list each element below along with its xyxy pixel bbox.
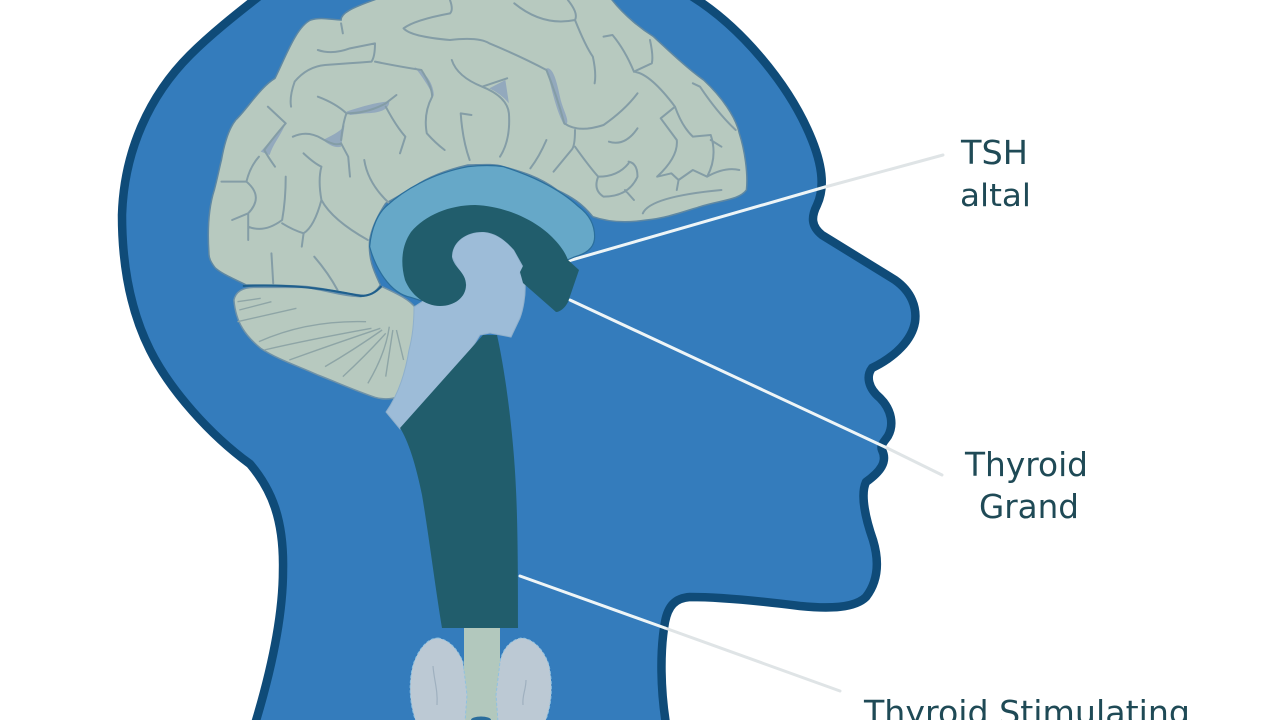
sulci wedges	[261, 67, 567, 155]
head silhouette	[122, 0, 915, 720]
line: stimulating hormone pointer	[520, 576, 840, 691]
label: altal: altal	[960, 178, 1031, 214]
thyroid right lobe	[496, 638, 551, 720]
cerebellum	[234, 287, 416, 399]
label: Grand: Grand	[979, 487, 1079, 526]
corpus callosum arc	[370, 165, 595, 310]
trachea column	[400, 335, 518, 628]
line: thyroid pointer	[570, 300, 942, 475]
thyroid left lobe	[410, 638, 467, 720]
line: TSH pointer	[568, 155, 943, 261]
brainstem	[386, 232, 525, 429]
brain lower edge line	[243, 286, 381, 296]
label: Thyroid: Thyroid	[964, 445, 1088, 484]
windpipe	[464, 628, 500, 720]
cerebrum	[208, 0, 747, 295]
label: TSH: TSH	[960, 133, 1028, 172]
sulci lines	[221, 0, 739, 290]
brain	[208, 0, 747, 399]
hypothalamus dark arc	[402, 205, 579, 312]
isthmus marker	[471, 716, 491, 720]
